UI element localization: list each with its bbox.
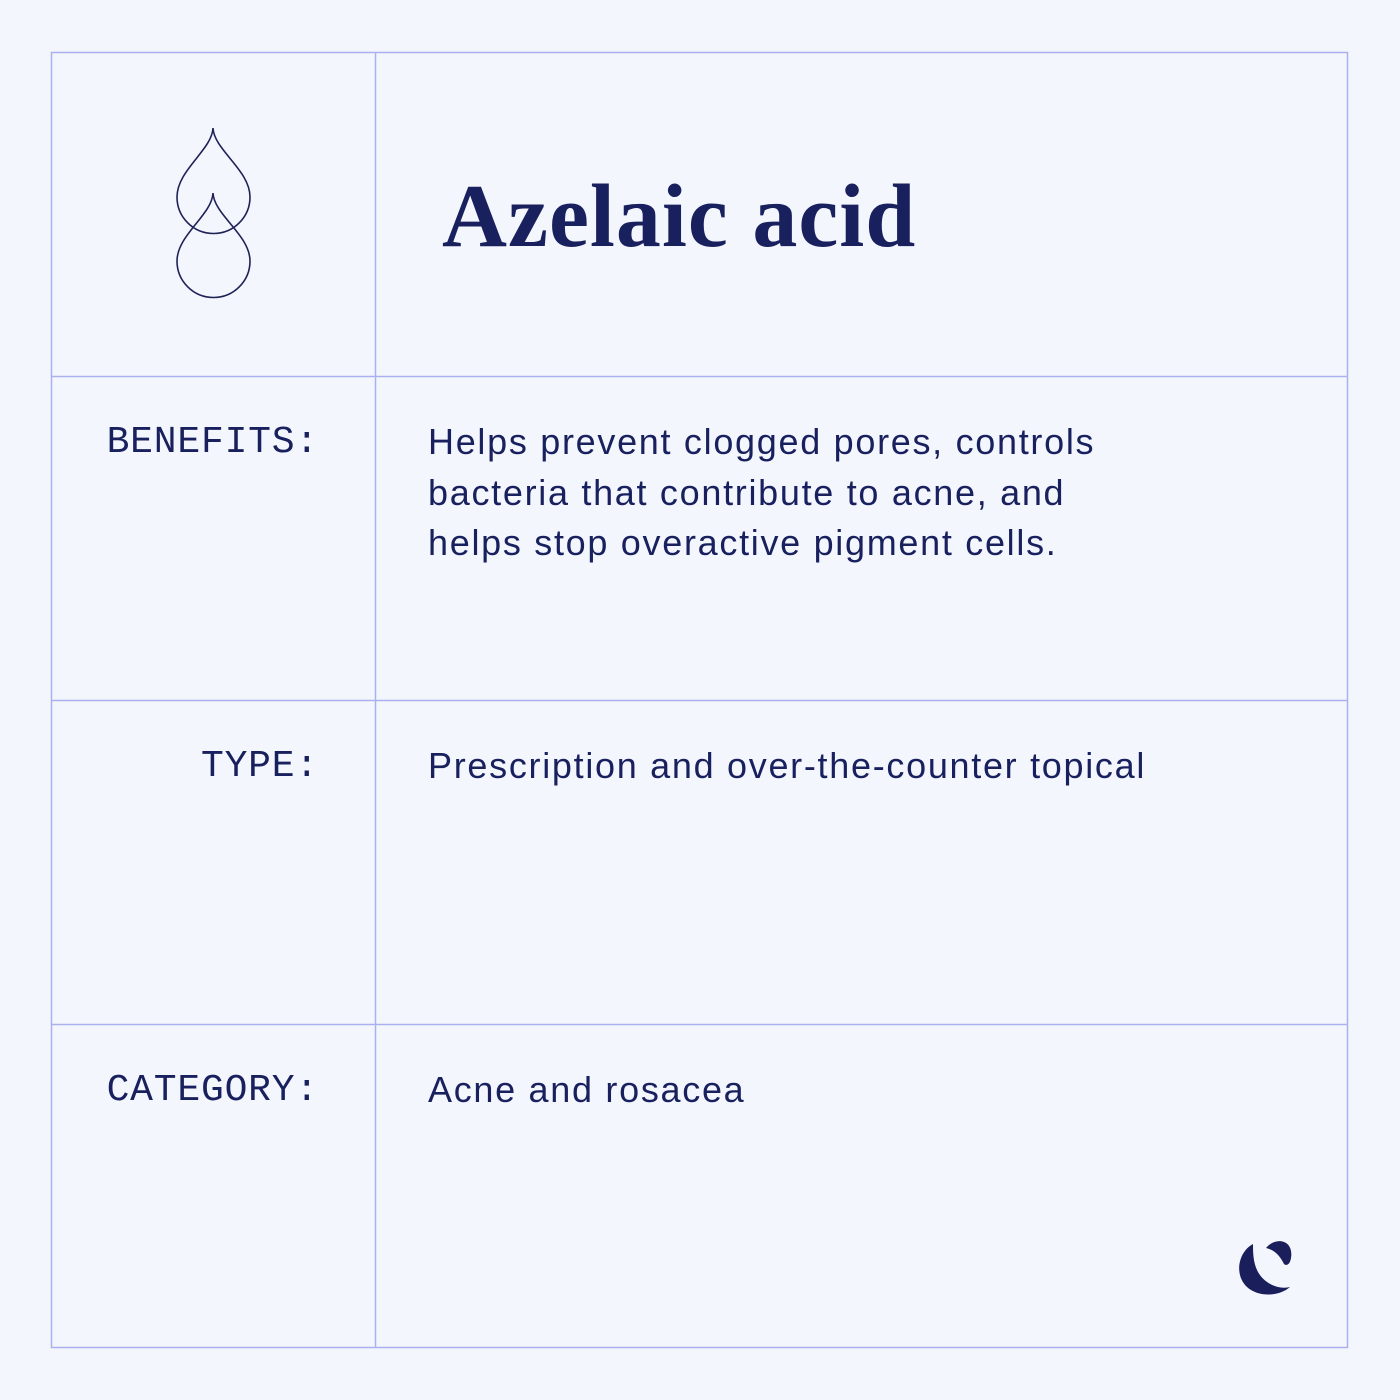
label: category: CATEGORY: (107, 1069, 319, 1112)
text: benefits: helps stop overactive pigment cells. (428, 522, 1057, 563)
logo (1239, 1241, 1292, 1294)
text: benefits: bacteria that contribute to acne, and (428, 472, 1065, 512)
text: benefits: Helps prevent clogged pores, controls (428, 421, 1095, 462)
label: type: TYPE: (201, 745, 319, 788)
text: category: Acne and rosacea (428, 1069, 745, 1110)
title: Azelaic acid (442, 167, 916, 266)
text: benefits (428, 421, 1095, 563)
label: benefits: BENEFITS: (107, 421, 319, 464)
icon: droplets (176, 128, 251, 298)
text: type: Prescription and over-the-counter topical (428, 745, 1146, 786)
